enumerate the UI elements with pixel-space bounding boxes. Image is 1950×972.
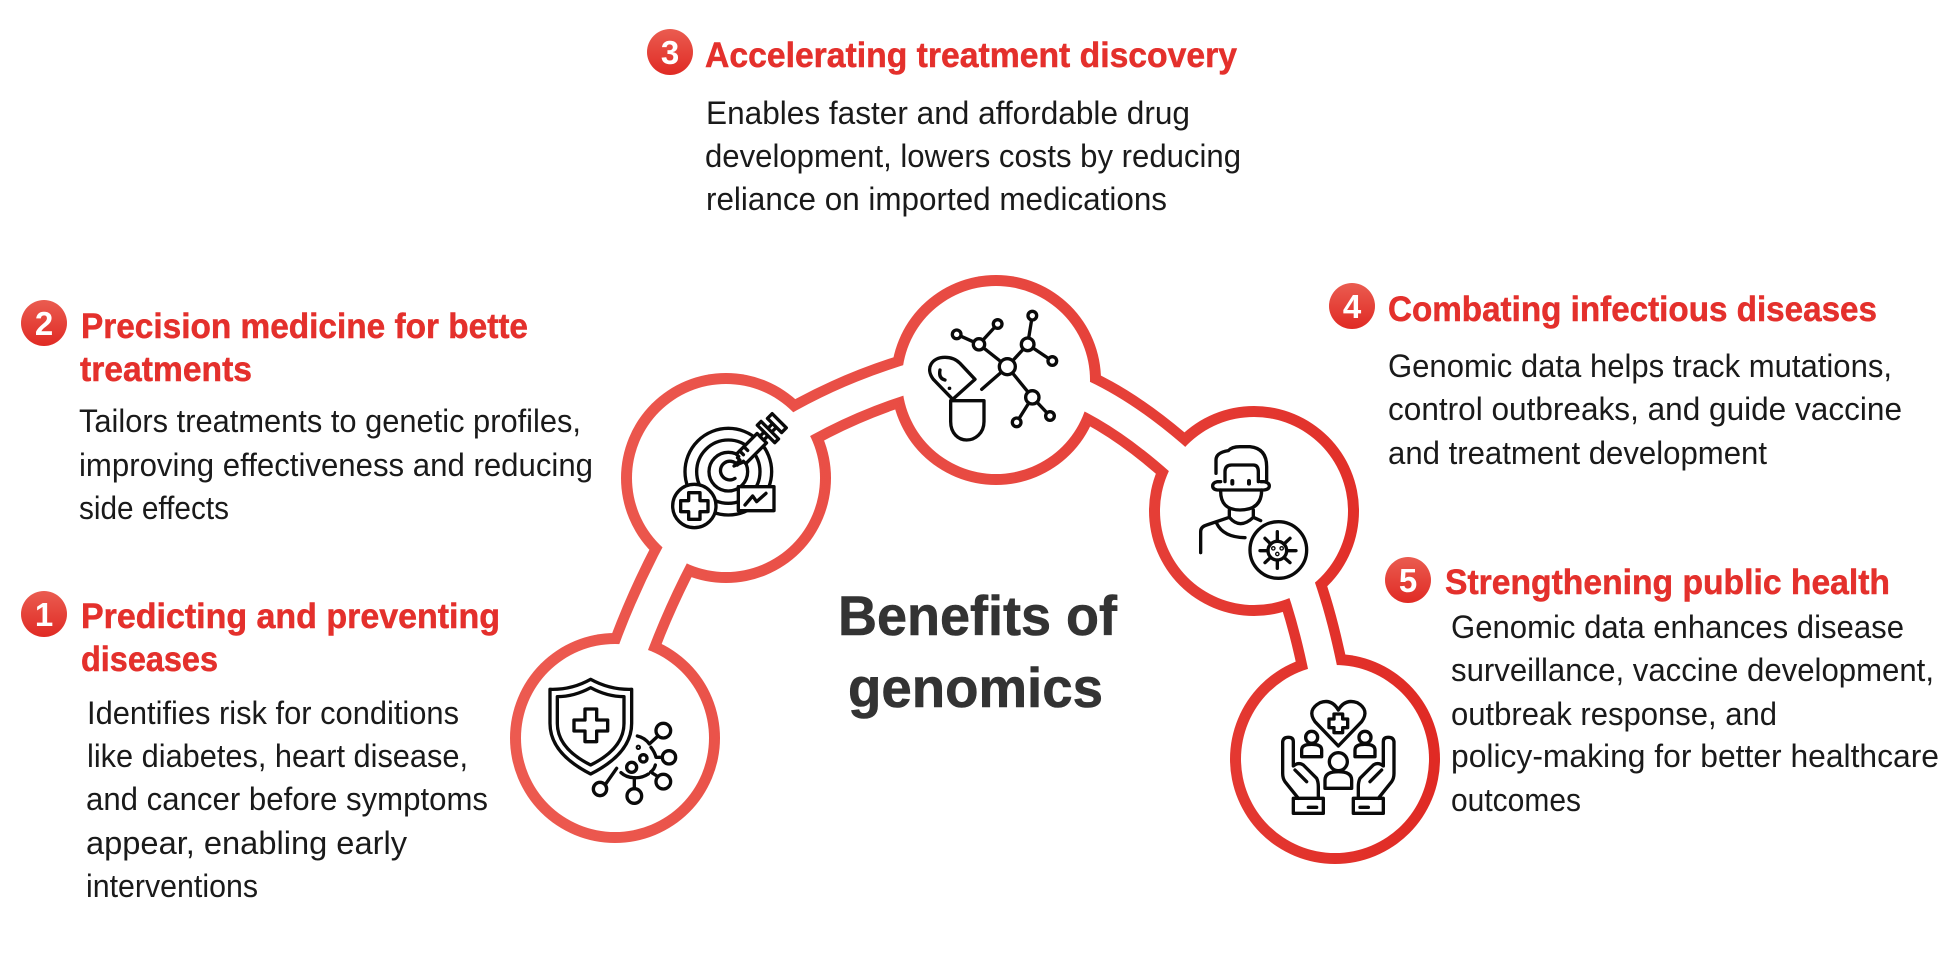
panel: 3 accelerating treatment discovery [647, 29, 1241, 217]
number badge 2: 2 [35, 305, 53, 342]
body text 1: like diabetes, heart disease, [87, 738, 468, 774]
heading 1: diseases [81, 640, 218, 679]
heading 1 [81, 597, 500, 679]
number badge 5 [1385, 557, 1431, 603]
body text 1: and cancer before symptoms [86, 781, 488, 817]
panel: 4 combating infectious diseases [1329, 283, 1902, 471]
heading 2: treatments [80, 350, 252, 389]
center title: genomics [848, 656, 1103, 719]
heading 1: Predicting and preventing [81, 597, 500, 636]
body text 5 [1451, 609, 1939, 818]
body text 2: improving effectiveness and reducing [79, 447, 593, 483]
center title: Benefits of [838, 584, 1117, 647]
icon: hands holding people and heart [1283, 701, 1394, 813]
heading 2 [80, 307, 528, 389]
panel: 1 predicting and preventing diseases [21, 591, 500, 904]
body text 5: policy-making for better healthcare [1451, 738, 1939, 774]
number badge 5: 5 [1399, 562, 1417, 599]
body text 4: and treatment development [1388, 435, 1767, 471]
number badge 3: 3 [661, 34, 679, 71]
body text 2 [79, 403, 593, 526]
body text 1: appear, enabling early [86, 825, 408, 861]
panel: 5 strengthening public health [1385, 557, 1939, 818]
body text 4: Genomic data helps track mutations, [1388, 348, 1892, 384]
number badge 3 [647, 29, 693, 75]
number badge 2 [21, 300, 67, 346]
body text 5: outbreak response, and [1451, 696, 1777, 732]
body text 5: Genomic data enhances disease [1451, 609, 1904, 645]
number badge 4: 4 [1343, 288, 1362, 325]
body text 4 [1388, 348, 1902, 471]
icon: shield and virus [550, 679, 676, 803]
heading 3: Accelerating treatment discovery [705, 36, 1238, 75]
body text 1 [86, 695, 488, 904]
heading 5: Strengthening public health [1445, 563, 1890, 602]
body text 1: Identifies risk for conditions [87, 695, 459, 731]
number badge 4 [1329, 283, 1375, 329]
body text 3: Enables faster and affordable drug [706, 95, 1190, 131]
number badge 1: 1 [35, 596, 53, 633]
body text 5: outcomes [1451, 782, 1581, 818]
panel: 2 precision medicine [21, 300, 593, 526]
heading 4: Combating infectious diseases [1388, 290, 1877, 329]
center title [838, 584, 1117, 719]
body text 2: side effects [79, 490, 229, 526]
number badge 1 [21, 591, 67, 637]
icon: capsule and molecule [930, 311, 1057, 440]
body text 4: control outbreaks, and guide vaccine [1388, 391, 1902, 427]
body text 3: development, lowers costs by reducing [705, 138, 1241, 174]
body text 5: surveillance, vaccine development, [1451, 652, 1934, 688]
body text 3: reliance on imported medications [706, 181, 1167, 217]
icon: target with syringe [673, 412, 788, 528]
body text 3 [705, 95, 1241, 217]
arch of five connected circles [510, 275, 1440, 864]
body text 1: interventions [86, 868, 258, 904]
heading 2: Precision medicine for bette [81, 307, 528, 346]
body text 2: Tailors treatments to genetic profiles, [79, 403, 581, 439]
icon: masked person with virus [1201, 447, 1307, 578]
